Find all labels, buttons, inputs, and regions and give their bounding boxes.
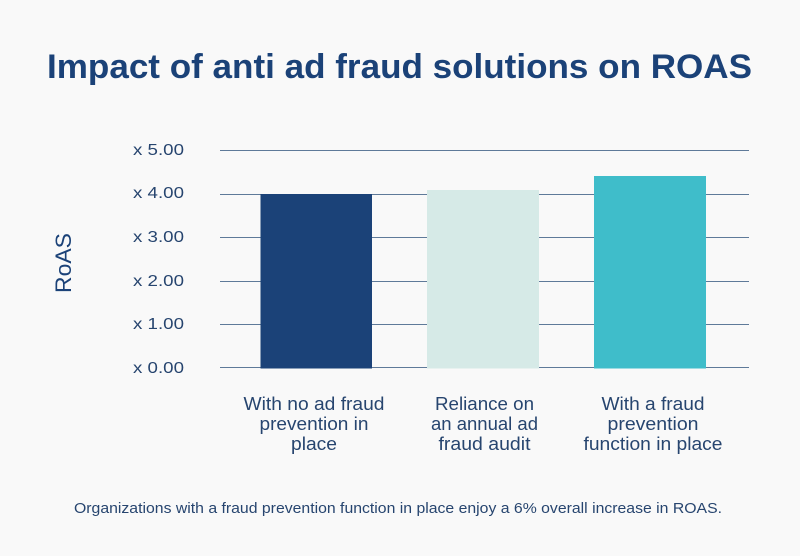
y-axis title: RoAS <box>51 233 76 293</box>
y-axis labels: x 0.00 <box>133 360 184 377</box>
bar: annual ad fraud audit <box>427 190 539 368</box>
y-axis labels: x 3.00 <box>133 229 184 246</box>
category label: annual ad fraud audit: an annual ad <box>431 414 538 434</box>
category label: annual ad fraud audit: fraud audit <box>438 434 530 454</box>
y-axis labels <box>133 142 184 377</box>
category label: no ad fraud prevention <box>244 394 384 454</box>
bar chart <box>133 142 749 377</box>
category label: fraud prevention function <box>584 394 722 454</box>
category label: fraud prevention function: function in place <box>584 434 722 454</box>
category label: no ad fraud prevention: prevention in <box>260 414 368 434</box>
category label: annual ad fraud audit: Reliance on <box>435 394 534 414</box>
bar: fraud prevention function <box>594 176 706 368</box>
category label: no ad fraud prevention: place <box>291 434 337 454</box>
bar: no ad fraud prevention <box>260 194 372 368</box>
y-axis labels: x 1.00 <box>133 316 184 333</box>
category label: fraud prevention function: With a fraud <box>602 394 704 414</box>
footnote: Organizations with a fraud prevention function in place enjoy a 6% overall increase in ROAS. <box>74 501 722 517</box>
y-axis labels: x 4.00 <box>133 185 184 202</box>
category label: annual ad fraud audit <box>431 394 538 454</box>
y-axis labels: x 2.00 <box>133 273 184 290</box>
y-axis labels: x 5.00 <box>133 142 184 159</box>
title: Impact of anti ad fraud solutions on ROAS <box>47 48 752 86</box>
category label: fraud prevention function: prevention <box>608 414 698 434</box>
category label: no ad fraud prevention: With no ad fraud <box>244 394 384 414</box>
